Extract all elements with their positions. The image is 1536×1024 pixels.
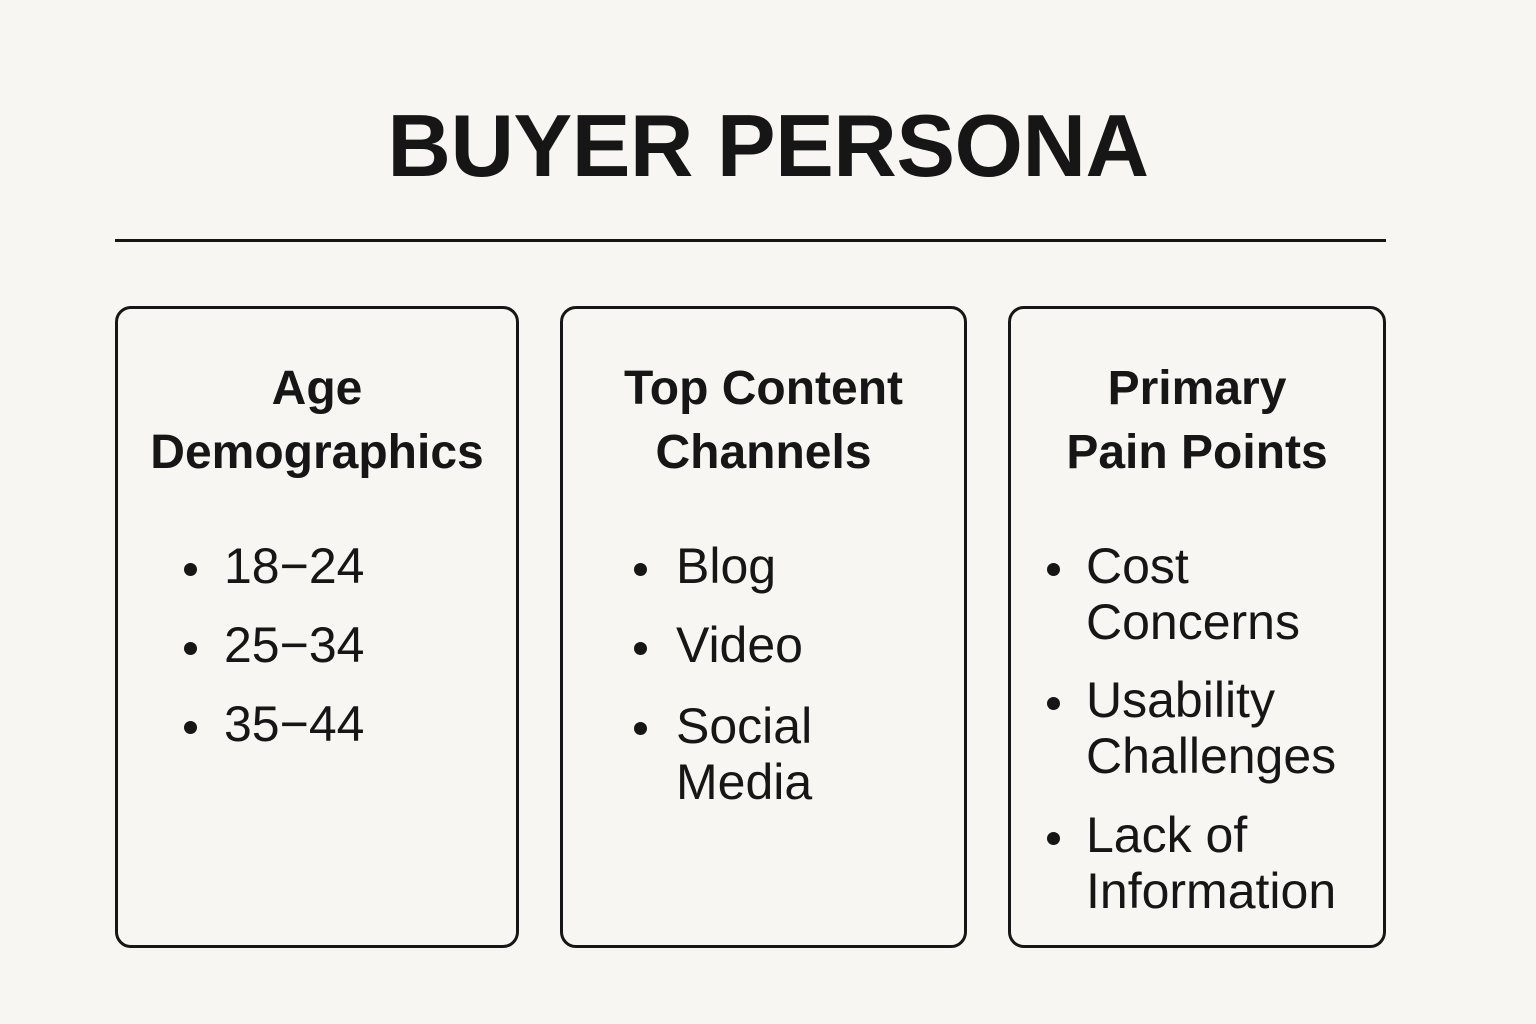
title: BUYER PERSONA [387,96,1149,195]
list: age ranges: 18−24 [224,538,364,594]
list: pain points: Challenges [1086,728,1336,784]
list: age ranges: 25−34 [224,617,364,673]
list: age ranges: 35−44 [224,696,364,752]
heading: top content channels: Top Content [624,362,903,415]
list: pain points: Usability [1086,672,1275,728]
heading: primary pain points: Pain Points [1066,426,1328,479]
list: pain points: Cost [1086,538,1189,594]
heading: primary pain points [1066,362,1328,479]
list: channels [634,538,812,810]
list: pain points: Information [1086,863,1336,919]
heading: top content channels: Channels [655,426,872,479]
heading: age demographics: Age [272,362,362,415]
heading: top content channels [624,362,903,479]
list: pain points: Lack of [1086,807,1247,863]
list: channels: Video [676,617,803,673]
panel: top content channels [560,306,967,948]
list: channels: Media [676,754,812,810]
list: pain points: Concerns [1086,594,1300,650]
panel: primary pain points [1008,306,1386,948]
list: age ranges [184,538,364,752]
list: pain points [1047,538,1336,919]
heading: primary pain points: Primary [1108,362,1286,415]
heading: age demographics [150,362,484,479]
list: channels: Social [676,698,812,754]
heading: age demographics: Demographics [150,426,484,479]
list: channels: Blog [676,538,776,594]
panel: age demographics [115,306,519,948]
